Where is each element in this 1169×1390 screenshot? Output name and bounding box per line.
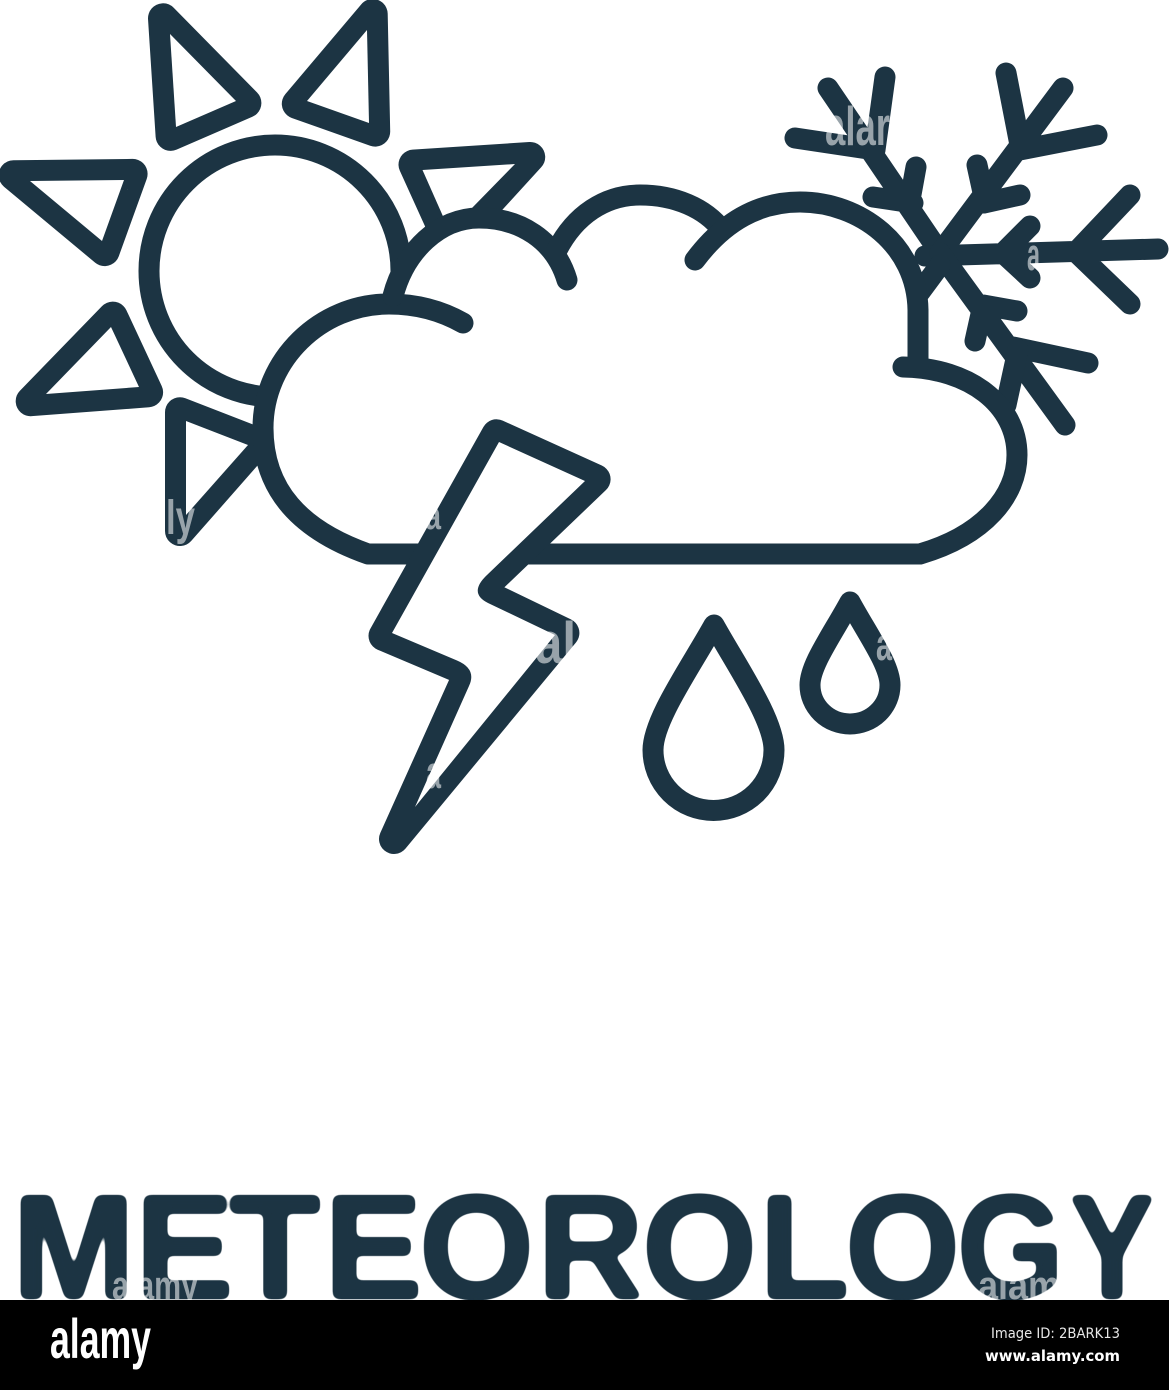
cloud white fill [263,195,1017,554]
footer bar [0,1300,1169,1390]
icon: weather illustration [14,14,1158,839]
cloud outline: right lobe [695,202,918,365]
watermark fragments: alam [978,1264,1060,1308]
sun ray: bottom [180,412,258,531]
icon: sun [14,14,530,531]
sun ray: left [14,174,133,251]
watermark fragments [112,95,1060,1308]
cloud outline: middle lobe [557,195,722,250]
snowflake arm: upper left [795,77,940,253]
watermark fragments: alar [825,95,890,157]
watermark fragments: a [876,619,893,670]
icon: large rain drop [653,625,774,810]
heading: METEOROLOGY: G [957,1165,1064,1330]
icon: small rain drop [810,602,890,724]
watermark fragments: alamy [112,1264,199,1308]
icon: lightning bolt [384,434,596,839]
snowflake arm: lower stub [920,265,1018,405]
watermark fragments: a [426,747,442,798]
footer image id: Image ID: 2BARK13 [991,1326,1120,1342]
icon: snowflake [795,73,1158,425]
watermark fragments: a [1027,229,1041,280]
snowflake arm: lower right [940,253,1088,425]
sun ray: top left [163,18,246,136]
sun ray: right [414,157,530,245]
sun ray: top right [297,14,375,132]
snowflake arm: right [925,195,1158,304]
footer logo: alamy: alamy [50,1307,151,1370]
sun disc [149,145,401,397]
sun ray: lower left [31,317,148,401]
footer url: www.alamy.com [985,1347,1120,1365]
heading: METEOROLOGY: Y [1069,1165,1155,1330]
watermark fragments: a [425,494,442,538]
snowflake arm: upper right [940,73,1097,253]
icon: cloud [263,195,1017,554]
watermark fragments: ly [166,492,195,545]
watermark fragments: al [535,611,576,676]
cloud outline: main [263,304,1017,554]
cloud outline: upper left lobe [393,218,567,296]
heading: METEOROLOGY: METEOROLO [12,1165,960,1330]
